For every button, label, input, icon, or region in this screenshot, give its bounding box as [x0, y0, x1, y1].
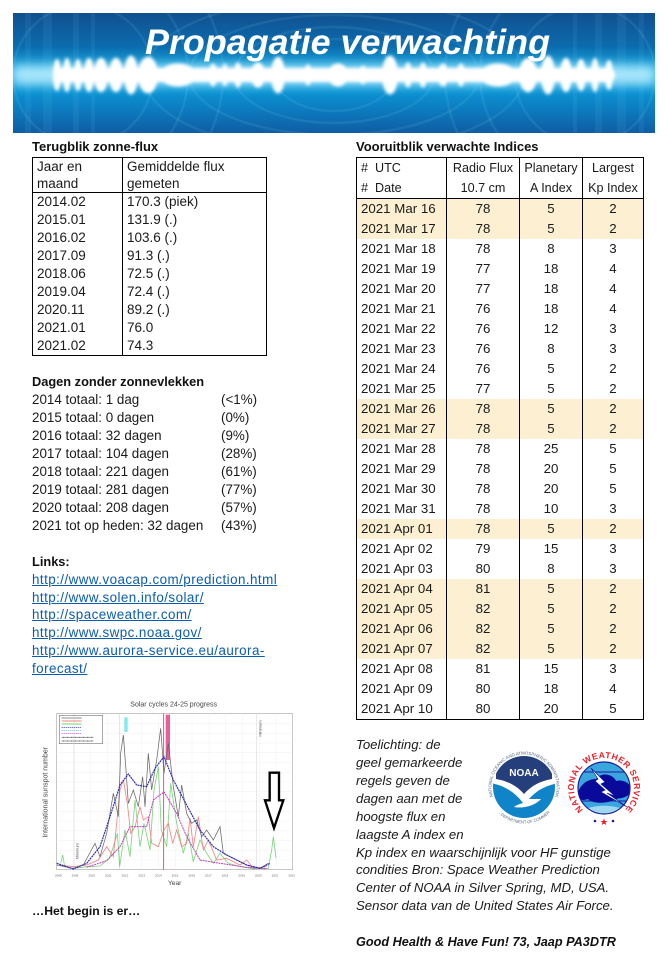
- text block: dagen zonder zonnevlekken: 2016 totaal: 32 dagen: [32, 428, 162, 443]
- axis labels: [43, 746, 295, 887]
- table: verwachte indices: 2: [609, 581, 617, 596]
- table: verwachte indices: 2021 Apr 02: [361, 541, 433, 556]
- table: verwachte indices: 2: [609, 221, 617, 236]
- table: verwachte indices: 5: [547, 621, 555, 636]
- marker lines: Minimum: [257, 720, 262, 737]
- text block: dagen zonder zonnevlekken: 2020 totaal: 208 dagen: [32, 500, 169, 515]
- table: verwachte indices: 2021 Mar 29: [361, 461, 436, 476]
- axis labels: 2020: [255, 874, 262, 878]
- table: verwachte indices: 81: [476, 581, 490, 596]
- table: verwachte indices: 5: [547, 421, 555, 436]
- axis labels: 2016: [188, 874, 195, 878]
- table: verwachte indices: 5: [547, 581, 555, 596]
- table: verwachte indices: 80: [476, 681, 490, 696]
- table: verwachte indices: 81: [476, 661, 490, 676]
- table: verwachte indices: 2: [609, 601, 617, 616]
- table: verwachte indices: 12: [544, 321, 558, 336]
- text block: dagen zonder zonnevlekken: 2014 totaal: 1 dag: [32, 392, 139, 407]
- table: verwachte indices: 8: [547, 561, 555, 576]
- table: verwachte indices: [356, 157, 644, 720]
- table: verwachte indices: 2021 Apr 06: [361, 621, 433, 636]
- table: verwachte indices: 20: [544, 701, 558, 716]
- table: verwachte indices: 3: [609, 341, 617, 356]
- banner title: Propagatie verwachting: [145, 23, 550, 62]
- axis labels: 2010: [88, 874, 95, 878]
- table: verwachte indices: 15: [544, 661, 558, 676]
- table: zonne-flux: 2015.01: [37, 212, 86, 227]
- table: verwachte indices: 2021 Mar 16: [361, 201, 436, 216]
- table: verwachte indices: 78: [476, 421, 490, 436]
- data series: [57, 728, 276, 869]
- axis labels: 2018: [222, 874, 229, 878]
- table: verwachte indices: 2021 Mar 21: [361, 301, 436, 316]
- table: verwachte indices: Kp Index: [588, 181, 638, 195]
- chart legend: [59, 715, 103, 744]
- text block: dagen zonder zonnevlekken: 2017 totaal: 104 dagen: [32, 446, 169, 461]
- table: verwachte indices: 78: [476, 461, 490, 476]
- links list: http://www.voacap.com/prediction.html: [32, 572, 277, 587]
- table: verwachte indices: 77: [476, 381, 490, 396]
- table: verwachte indices: # UTC: [361, 161, 401, 175]
- table: verwachte indices: # Date: [361, 181, 402, 195]
- table: verwachte indices: 76: [476, 361, 490, 376]
- table: verwachte indices: 18: [544, 681, 558, 696]
- chart title: Solar cycles 24-25 progress: [130, 702, 218, 709]
- table: zonne-flux: 2021.01: [37, 320, 86, 335]
- table: verwachte indices: 4: [609, 301, 617, 316]
- table: verwachte indices: 20: [544, 481, 558, 496]
- table: verwachte indices: 78: [476, 401, 490, 416]
- table: verwachte indices: 3: [609, 541, 617, 556]
- table: verwachte indices: 15: [544, 541, 558, 556]
- marker lines: Minimum: [74, 842, 79, 859]
- table: verwachte indices: 2: [609, 421, 617, 436]
- sign-off: Good Health & Have Fun! 73, Jaap PA3DTR: [356, 935, 616, 949]
- axis labels: 2014: [155, 874, 162, 878]
- table: verwachte indices: 78: [476, 521, 490, 536]
- table: verwachte indices: 82: [476, 641, 490, 656]
- text block: toelichting: dagen aan met de: [356, 791, 462, 806]
- table: zonne-flux: 2020.11: [37, 302, 85, 317]
- text block: dagen zonder zonnevlekken: (0%): [221, 410, 249, 425]
- text block: dagen zonder zonnevlekken: (28%): [221, 446, 257, 461]
- table: verwachte indices: 76: [476, 341, 490, 356]
- table: zonne-flux: maand: [37, 176, 78, 191]
- table: verwachte indices: 18: [544, 301, 558, 316]
- table: zonne-flux: 89.2 (.): [127, 302, 170, 317]
- table: verwachte indices: 2: [609, 641, 617, 656]
- table: zonne-flux: 131.9 (.): [127, 212, 177, 227]
- table: verwachte indices: 2021 Apr 07: [361, 641, 433, 656]
- table: verwachte indices: 78: [476, 201, 490, 216]
- banner: [13, 13, 655, 133]
- table: verwachte indices: 2: [609, 361, 617, 376]
- links list: http://spaceweather.com/: [32, 607, 192, 622]
- table: verwachte indices: 2021 Mar 20: [361, 281, 436, 296]
- table: verwachte indices: 2021 Mar 26: [361, 401, 436, 416]
- table: verwachte indices: 5: [547, 601, 555, 616]
- table: verwachte indices: 8: [547, 241, 555, 256]
- caption: het begin: …Het begin is er…: [32, 904, 140, 918]
- axis labels: Year: [168, 880, 182, 887]
- text block: toelichting: [356, 737, 614, 913]
- table: verwachte indices: 5: [609, 441, 617, 456]
- table: zonne-flux: Gemiddelde flux: [127, 159, 225, 174]
- table: verwachte indices: 2: [609, 621, 617, 636]
- table: verwachte indices: 79: [476, 541, 490, 556]
- table: verwachte indices: 2021 Apr 01: [361, 521, 433, 536]
- table: verwachte indices: 80: [476, 561, 490, 576]
- links list: Links:: [32, 554, 70, 569]
- table: zonne-flux: 2019.04: [37, 284, 86, 299]
- table: verwachte indices: 2021 Mar 19: [361, 261, 436, 276]
- table: verwachte indices: 4: [609, 281, 617, 296]
- axis labels: 2009: [72, 874, 79, 878]
- text block: dagen zonder zonnevlekken: 2018 totaal: 221 dagen: [32, 464, 169, 479]
- table: verwachte indices: 2021 Mar 18: [361, 241, 436, 256]
- text block: toelichting: Toelichting: de: [356, 737, 441, 752]
- links list: forecast/: [32, 661, 87, 676]
- table: verwachte indices: 25: [544, 441, 558, 456]
- table: verwachte indices: 5: [609, 701, 617, 716]
- table: zonne-flux: 2014.02: [37, 194, 86, 209]
- table: verwachte indices: 3: [609, 501, 617, 516]
- text block: dagen zonder zonnevlekken: 2015 totaal: 0 dagen: [32, 410, 154, 425]
- table: verwachte indices: 2021 Mar 17: [361, 221, 436, 236]
- table: verwachte indices: 82: [476, 621, 490, 636]
- table: verwachte indices: 5: [547, 381, 555, 396]
- text block: toelichting: regels geven de: [356, 773, 450, 788]
- table: verwachte indices: 2021 Mar 31: [361, 501, 436, 516]
- table: verwachte indices: 2021 Mar 30: [361, 481, 436, 496]
- text block: toelichting: Kp index en waarschijnlijk voor HF gunstige: [356, 845, 611, 860]
- table: verwachte indices: 2: [609, 401, 617, 416]
- table: verwachte indices: Planetary: [524, 161, 578, 175]
- arrow: pointing at 2021: [265, 773, 283, 828]
- table: verwachte indices: 5: [547, 401, 555, 416]
- table: verwachte indices: 82: [476, 601, 490, 616]
- text block: dagen zonder zonnevlekken: (9%): [221, 428, 249, 443]
- text block: toelichting: hoogste flux en: [356, 809, 445, 824]
- text block: dagen zonder zonnevlekken: Dagen zonder zonnevlekken: [32, 374, 204, 389]
- table: verwachte indices: 3: [609, 321, 617, 336]
- table: verwachte indices: 2021 Apr 09: [361, 681, 433, 696]
- table: verwachte indices: 18: [544, 261, 558, 276]
- axis labels: 2013: [138, 874, 145, 878]
- heading: vooruitblik: Vooruitblik verwachte Indices: [356, 139, 539, 154]
- links list: http://www.swpc.noaa.gov/: [32, 625, 202, 640]
- table: verwachte indices: 2021 Apr 04: [361, 581, 433, 596]
- text block: toelichting: geel gemarkeerde: [356, 755, 462, 770]
- text block: dagen zonder zonnevlekken: (61%): [221, 464, 257, 479]
- marker lines: [74, 714, 262, 870]
- table: verwachte indices: 5: [609, 481, 617, 496]
- table: verwachte indices: 2021 Apr 10: [361, 701, 433, 716]
- chart: solar cycles 24-25 progress: [42, 701, 295, 887]
- axis labels: 2022: [288, 874, 295, 878]
- table: zonne-flux: 72.4 (.): [127, 284, 170, 299]
- table: zonne-flux: 76.0: [127, 320, 153, 335]
- table: verwachte indices: 3: [609, 661, 617, 676]
- table: zonne-flux: 170.3 (piek): [127, 194, 198, 209]
- table: verwachte indices: 77: [476, 281, 490, 296]
- table: verwachte indices: 4: [609, 261, 617, 276]
- links list: http://www.aurora-service.eu/aurora-: [32, 643, 265, 658]
- text block: dagen zonder zonnevlekken: (57%): [221, 500, 257, 515]
- table: verwachte indices: 5: [547, 201, 555, 216]
- table: verwachte indices: 5: [547, 641, 555, 656]
- axis labels: 2019: [238, 874, 245, 878]
- table: verwachte indices: 2021 Apr 08: [361, 661, 433, 676]
- links list: [32, 554, 278, 676]
- text block: dagen zonder zonnevlekken: (43%): [221, 518, 257, 533]
- table: verwachte indices: 18: [544, 281, 558, 296]
- table: zonne-flux: gemeten: [127, 176, 180, 191]
- table: verwachte indices: 10.7 cm: [461, 181, 505, 195]
- axis labels: 2017: [205, 874, 212, 878]
- table: verwachte indices: 2021 Mar 22: [361, 321, 436, 336]
- table: verwachte indices: 78: [476, 241, 490, 256]
- table: verwachte indices: Radio Flux: [453, 161, 513, 175]
- axis labels: 2021: [272, 874, 279, 878]
- table: verwachte indices: 2021 Mar 27: [361, 421, 436, 436]
- heading: terugblik: Terugblik zonne-flux: [32, 139, 158, 154]
- table: zonne-flux: 74.3: [127, 338, 153, 353]
- table: verwachte indices: 4: [609, 681, 617, 696]
- table: verwachte indices: 78: [476, 481, 490, 496]
- axis labels: 2015: [172, 874, 179, 878]
- table: verwachte indices: 8: [547, 341, 555, 356]
- table: zonne-flux: 91.3 (.): [127, 248, 170, 263]
- table: verwachte indices: 78: [476, 221, 490, 236]
- text block: dagen zonder zonnevlekken: (<1%): [221, 392, 257, 407]
- table: verwachte indices: 20: [544, 461, 558, 476]
- table: verwachte indices: 76: [476, 301, 490, 316]
- table: zonne-flux: 2018.06: [37, 266, 86, 281]
- table: verwachte indices: 2021 Apr 03: [361, 561, 433, 576]
- table: zonne-flux: 72.5 (.): [127, 266, 170, 281]
- table: verwachte indices: 5: [547, 361, 555, 376]
- text block: toelichting: Sensor data van de United States Air Force.: [356, 898, 614, 913]
- table: verwachte indices: 2021 Mar 24: [361, 361, 436, 376]
- table: verwachte indices: 2021 Mar 25: [361, 381, 436, 396]
- axis labels: 2012: [122, 874, 129, 878]
- table: verwachte indices: 2: [609, 521, 617, 536]
- icon: NOAA logo: NOAA: [509, 768, 539, 779]
- table: verwachte indices: 5: [547, 221, 555, 236]
- table: zonne-flux: Jaar en: [37, 159, 82, 174]
- stars: [594, 818, 614, 825]
- table: zonne-flux: [32, 157, 267, 356]
- table: verwachte indices: 2: [609, 381, 617, 396]
- icon: National Weather Service logo: NATIONAL WEATHER SERVICE: [568, 752, 640, 814]
- text block: dagen zonder zonnevlekken: (77%): [221, 482, 257, 497]
- table: verwachte indices: 76: [476, 321, 490, 336]
- text block: toelichting: condities Bron: Space Weather Prediction: [356, 862, 600, 877]
- axis labels: 2008: [55, 874, 62, 878]
- text block: dagen zonder zonnevlekken: 2021 tot op heden: 32 dagen: [32, 518, 203, 533]
- table: zonne-flux: 2016.02: [37, 230, 86, 245]
- table: verwachte indices: 10: [544, 501, 558, 516]
- table: verwachte indices: Largest: [592, 161, 634, 175]
- icon: NOAA logo: NATIONAL OCEANIC AND ATMOSPHERIC ADMINISTRATION: [488, 752, 560, 798]
- table: verwachte indices: 5: [547, 521, 555, 536]
- table: verwachte indices: 78: [476, 441, 490, 456]
- text block: toelichting: laagste A index en: [356, 827, 464, 842]
- table: verwachte indices: 2021 Mar 28: [361, 441, 436, 456]
- table: verwachte indices: 77: [476, 261, 490, 276]
- text block: dagen zonder zonnevlekken: [32, 374, 257, 533]
- table: verwachte indices: 5: [609, 461, 617, 476]
- table: zonne-flux: 2017.09: [37, 248, 86, 263]
- text block: toelichting: Center of NOAA in Silver Spring, MD, USA.: [356, 880, 609, 895]
- axis labels: 2011: [105, 874, 112, 878]
- table: verwachte indices: 2: [609, 201, 617, 216]
- table: verwachte indices: 3: [609, 561, 617, 576]
- text block: dagen zonder zonnevlekken: 2019 totaal: 281 dagen: [32, 482, 169, 497]
- table: verwachte indices: 2021 Mar 23: [361, 341, 436, 356]
- table: zonne-flux: 2021.02: [37, 338, 86, 353]
- table: verwachte indices: 2021 Apr 05: [361, 601, 433, 616]
- links list: http://www.solen.info/solar/: [32, 590, 204, 605]
- table: verwachte indices: 3: [609, 241, 617, 256]
- table: verwachte indices: 80: [476, 701, 490, 716]
- axis labels: International sunspot number: [43, 746, 50, 838]
- table: verwachte indices: A Index: [530, 181, 572, 195]
- table: zonne-flux: 103.6 (.): [127, 230, 177, 245]
- table: verwachte indices: 78: [476, 501, 490, 516]
